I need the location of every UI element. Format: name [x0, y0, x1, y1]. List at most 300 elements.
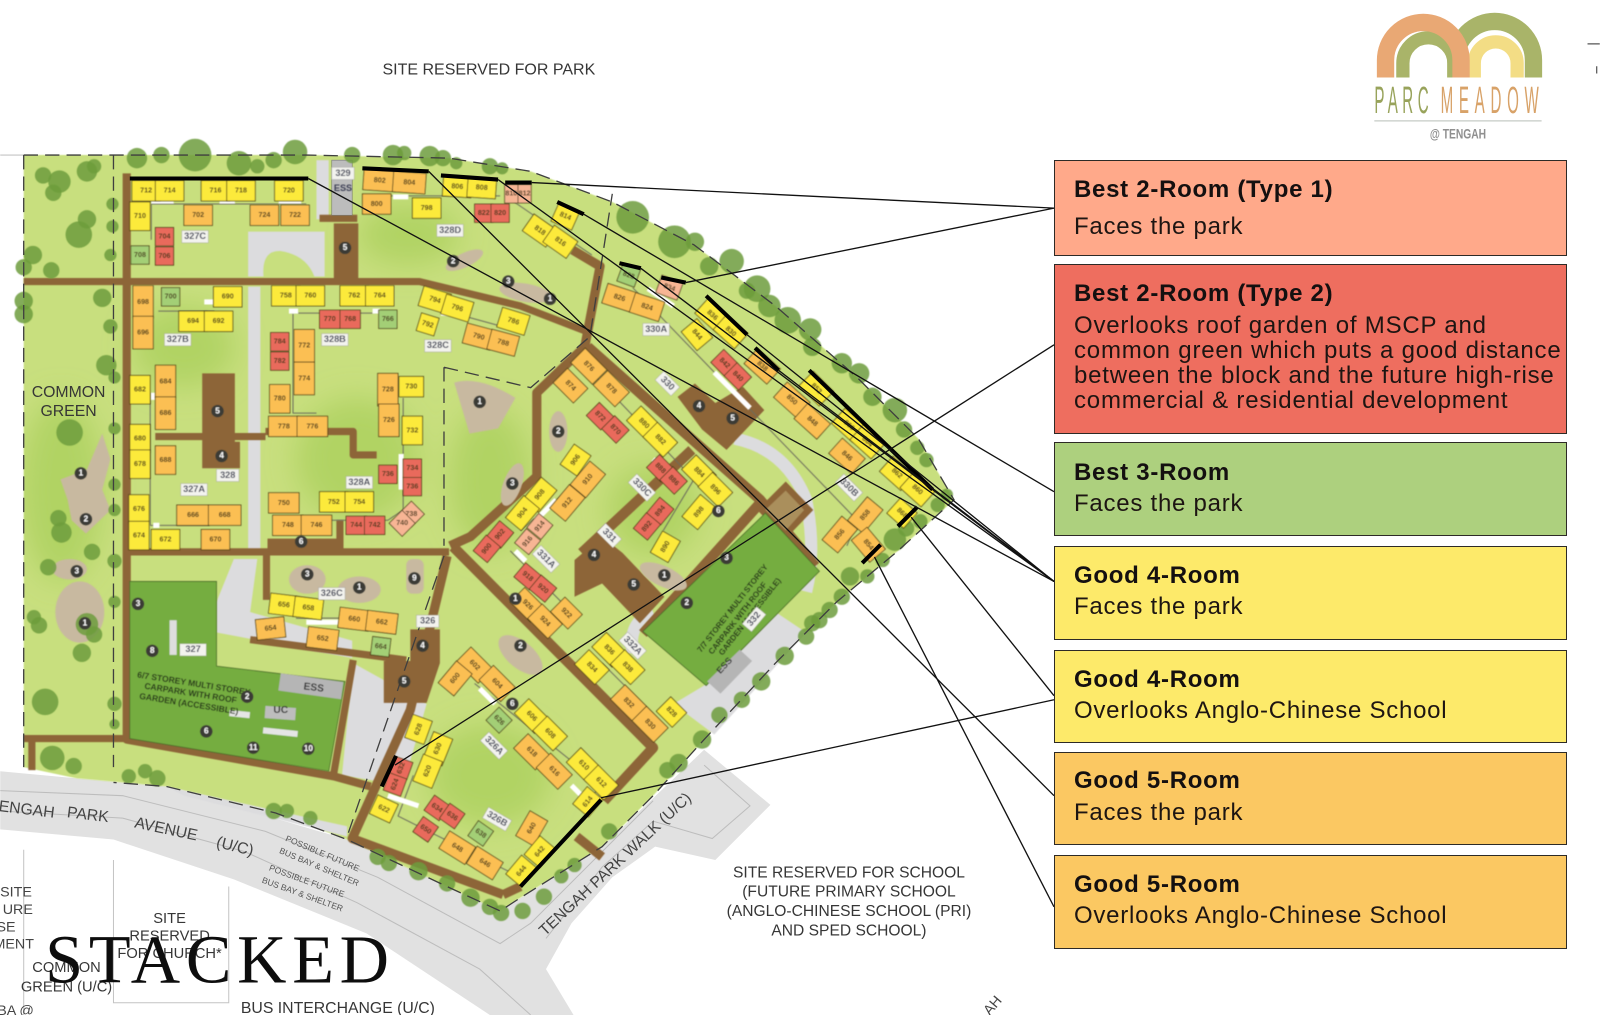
apartment units, block 326A: 600: [448, 671, 462, 685]
apartment units, block 326B: 648: [450, 841, 464, 854]
apartment units, block 328D: 804: [403, 178, 416, 187]
legend box: Best 3-Room: [1054, 442, 1567, 536]
apartment units, block 332A: 834: [585, 660, 599, 674]
apartment units, block 330C: 890: [659, 540, 672, 554]
apartment units, block 330A: 840: [731, 369, 745, 383]
apartment units, block 326C: 654: [264, 624, 277, 633]
apartment units, block 330A: 826: [613, 292, 626, 303]
apartment units, block 330B: 868: [895, 506, 909, 520]
numbered legend markers: 5: [631, 580, 636, 589]
apartment units, block 328C: 792: [421, 319, 435, 330]
apartment units, block 327A: 668: [219, 511, 231, 519]
apartment units, block 332A: 828: [665, 705, 679, 719]
Parc Meadow logo: PARC: [1374, 80, 1433, 122]
apartment units, block 326A: [438, 647, 618, 817]
block number tags: 332: [745, 610, 762, 628]
apartment units, block 327C: 702: [192, 211, 204, 219]
apartment units, block 330B: 850: [785, 393, 799, 407]
apartment units, block 326A: 610: [577, 758, 591, 772]
apartment units, block 330B: 860: [910, 483, 925, 497]
apartment units, block 331A: [473, 444, 605, 639]
apartment units, block 330C: 874: [564, 378, 578, 393]
multi-storey carpark 332: [643, 513, 819, 694]
apartment units, block 328B: 776: [306, 422, 318, 430]
apartment units, block 331A: 922: [559, 606, 574, 620]
numbered legend markers: 3: [136, 599, 141, 608]
apartment units, block 330B: 852: [809, 382, 823, 396]
legend box: Good 4-Room faces park: [1054, 546, 1567, 640]
apartment units, block 328B: [269, 286, 397, 437]
apartment units, block 328D: 810: [505, 190, 517, 198]
apartment units, block 331A: 908: [533, 488, 547, 502]
apartment units, block 326A: 608: [543, 726, 557, 740]
description: Faces the park: [1074, 213, 1243, 240]
apartment units, block 326C: 664: [374, 642, 387, 651]
apartment units, block 328B: 780: [274, 395, 286, 403]
numbered legend markers: 1: [662, 570, 667, 579]
block number tags: 328C: [427, 340, 449, 350]
apartment units, block 330B: 866: [842, 418, 856, 432]
apartment units, block 326A: 606: [525, 709, 539, 723]
road network: [0, 155, 770, 1015]
apartment units, block 330A: 824: [640, 301, 654, 313]
apartment units, block 327B: 700: [165, 293, 177, 301]
leader lines from units to legend boxes: [308, 171, 1054, 907]
site ground: [21, 155, 954, 911]
apartment units, block 330C: 872: [593, 409, 607, 423]
legend box: Good 5-Room faces park: [1054, 752, 1567, 845]
apartment units, block 328B: 762: [348, 292, 360, 300]
apartment units, block 328D: 818: [533, 224, 547, 237]
apartment units, block 326B: 638: [474, 827, 488, 840]
block number tags: 326: [420, 616, 435, 626]
numbered legend markers: 3: [506, 277, 511, 286]
apartment units, block 326A: 616: [547, 764, 561, 778]
apartment units, block 330B: 854: [862, 538, 875, 552]
apartment units, block 327A: 666: [187, 511, 199, 519]
apartment units, block 330C: 888: [653, 461, 667, 475]
label: site reserved for school: AND SPED SCHOOL): [771, 922, 927, 939]
legend box: Best 2-Room Type 2: [1054, 264, 1567, 434]
heading: Best 3-Room: [1074, 459, 1230, 486]
numbered legend markers: 1: [357, 583, 362, 592]
numbered legend markers: 6: [299, 537, 304, 546]
apartment units, block 326A: 618: [525, 745, 539, 759]
apartment units, block 328B: 760: [304, 292, 316, 300]
apartment units, block 328B: 778: [278, 422, 290, 430]
heading: Best 2-Room (Type 1): [1074, 176, 1333, 203]
block number tags: 328A: [348, 477, 371, 487]
apartment units, block 326B: 624: [389, 777, 401, 791]
apartment units, block 330B: 848: [805, 414, 819, 428]
apartment units, block 331A: 910: [581, 472, 595, 487]
multi-storey carpark 327: GARDEN (ACCESSIBLE): [139, 691, 239, 716]
apartment units, block 331A: 902: [493, 527, 507, 542]
label: possible future bus bays: POSSIBLE FUTURE: [284, 833, 361, 874]
apartment units, block 328A: 748: [282, 521, 294, 529]
label: site reserved for school: SITE RESERVED FOR SCHOOL: [733, 864, 965, 881]
numbered legend markers: 1: [79, 468, 84, 477]
apartment units, block 328D: 822: [478, 209, 490, 217]
description: Overlooks Anglo-Chinese School: [1074, 902, 1447, 929]
multi-storey carpark 332: GARDEN (ACCESSIBLE): [717, 576, 783, 657]
apartment units, block 327B: [133, 286, 242, 349]
apartment units, block 328B: 784: [274, 338, 286, 346]
apartment units, block 330A: 838: [755, 359, 769, 373]
brown footpaths: [24, 173, 815, 895]
apartment units, block 327A: 672: [160, 536, 171, 544]
label: common green under construction: COMMON: [32, 960, 101, 976]
apartment units, block 328D: 816: [553, 235, 568, 248]
numbered legend markers: [71, 242, 739, 755]
apartment units, block 330B: 846: [840, 449, 854, 463]
block number tags: 331A: [535, 547, 558, 570]
thick black facade markers: [130, 168, 933, 886]
label: possible future bus bays: BUS BAY & SHELTER: [278, 845, 361, 888]
apartment units, block 328C: 796: [450, 302, 464, 314]
apartment units, block 330C: 876: [582, 359, 596, 373]
apartment units, block 332A: 836: [602, 643, 616, 657]
apartment units, block 328A: 750: [278, 499, 290, 507]
label: site reserved for church: RESERVED: [129, 929, 210, 945]
trees along the boundary: [15, 139, 953, 921]
apartment units, block 327C: 724: [259, 211, 270, 219]
label: Tengah Park Avenue: AVENUE: [133, 815, 199, 844]
apartment units, block 328A: 736: [382, 470, 394, 478]
apartment units, block 330A: [602, 264, 780, 390]
apartment units, block 331A: 906: [569, 453, 582, 467]
apartment units, block 327B: 694: [187, 317, 199, 325]
apartment units, block 328A: 730: [405, 383, 417, 391]
apartment units, block 332A: [575, 632, 687, 742]
apartment units, block 328B: 758: [280, 292, 292, 300]
apartment units, block 326C: 652: [316, 634, 329, 643]
multi-storey carpark 327: UC: [273, 705, 289, 716]
apartment units, block 326B: 650: [419, 823, 433, 836]
label: site reserved for church: FOR CHURCH*: [117, 946, 222, 962]
apartment units, block 328B: 782: [274, 357, 286, 365]
numbered legend markers: 2: [451, 256, 456, 265]
apartment units, block 328D: 808: [476, 183, 488, 192]
apartment units, block 328A: 744: [350, 521, 362, 529]
apartment units, block 326B: 646: [478, 856, 492, 869]
apartment units, block 330C: 892: [640, 519, 654, 533]
multi-storey carpark 327: 6/7 STOREY MULTI STOREY: [137, 669, 251, 697]
label: common green under construction: GREEN (U/C): [21, 980, 112, 996]
multi-storey carpark 327: CARPARK WITH ROOF: [144, 681, 238, 705]
apartment units, block 328A: 734: [406, 464, 418, 472]
apartment units, block 330C: 870: [608, 422, 622, 436]
label: cropped site text at left: URE: [3, 902, 33, 918]
apartment units, block 326B: 642: [533, 845, 547, 859]
apartment units, block 328B: 764: [374, 292, 386, 300]
label: site reserved for school: (FUTURE PRIMARY SCHOOL: [742, 884, 956, 901]
apartment units, block 326B: 640: [525, 821, 538, 835]
apartment units, block 327C: 718: [235, 187, 247, 195]
apartment units, block 330A: 828: [622, 270, 636, 281]
apartment units, block 331A: 904: [516, 506, 529, 520]
block number tags: 329: [335, 168, 351, 178]
block number tags: 330A: [645, 324, 667, 334]
apartment units, block 327A: [129, 365, 241, 550]
apartment units, block 328D: 814: [558, 210, 573, 222]
block number tags: ESS: [334, 183, 352, 193]
block number tags: 326B: [485, 809, 510, 829]
apartment units, block 327A: 684: [160, 377, 171, 385]
apartment units, block 326C: 662: [375, 617, 388, 627]
numbered legend markers: 5: [730, 413, 735, 422]
numbered legend markers: 3: [305, 569, 310, 578]
apartment units, block 330B: [774, 371, 935, 562]
apartment units, block 331A: 924: [538, 614, 552, 628]
apartment units, block 327A: 688: [160, 456, 171, 464]
apartment units, block 332A: 832: [622, 696, 636, 710]
apartment units, block 326C: 656: [277, 600, 290, 610]
block number tags: 327C: [184, 231, 206, 241]
description: commercial & residential development: [1074, 387, 1508, 414]
apartment units, block 327B: 696: [137, 328, 149, 336]
description: Faces the park: [1074, 593, 1243, 620]
apartment units, block 328D: 812: [519, 190, 531, 198]
apartment units, block 326B: 636: [445, 809, 459, 823]
numbered legend markers: 8: [150, 646, 155, 655]
apartment units, block 327C: 712: [140, 187, 152, 195]
apartment units, block 328D: 798: [421, 204, 433, 212]
multi-storey carpark 332: 7/7 STOREY MULTI STOREY: [696, 562, 770, 654]
description: Overlooks Anglo-Chinese School: [1074, 697, 1447, 724]
apartment units, block 330C: 878: [604, 382, 618, 396]
apartment units, block 328A: 728: [382, 386, 394, 394]
description: Overlooks roof garden of MSCP and: [1074, 312, 1487, 339]
apartment units, block 328D: 802: [374, 176, 386, 185]
apartment units, block 330B: 858: [858, 508, 872, 522]
legend box: Best 2-Room Type 1: [1054, 160, 1567, 256]
heading: Good 4-Room: [1074, 562, 1241, 589]
label: possible future bus bays: BUS BAY & SHELTER: [261, 875, 344, 914]
description: between the block and the future high-rise: [1074, 362, 1555, 389]
apartment units, block 332A: 830: [643, 717, 657, 731]
label: possible future bus bays: [261, 833, 361, 914]
apartment units, block 328A: 738: [405, 510, 417, 518]
apartment units, block 330A: 836: [705, 308, 719, 322]
apartment units, block 331A: 912: [560, 496, 574, 510]
apartment units, block 330A: 844: [690, 327, 704, 342]
numbered legend markers: 3: [74, 566, 79, 575]
ESS block 329 strip: [332, 160, 352, 215]
label: common green: COMMON: [32, 384, 105, 401]
label: site reserved for church: SITE: [153, 911, 186, 927]
apartment units, block 330C: 886: [667, 473, 681, 487]
label: common green: GREEN: [40, 403, 97, 420]
apartment units, block 327C: 706: [159, 252, 170, 260]
apartment units, block 327A: 676: [133, 505, 145, 513]
label: Tengah Park Avenue: [0, 798, 255, 860]
block number tags: [164, 167, 863, 831]
block number tags: 328D: [439, 225, 461, 235]
legend box: Good 5-Room overlooks school: [1054, 855, 1567, 949]
apartment units, block 328A: 732: [406, 426, 418, 434]
heading: Good 4-Room: [1074, 666, 1241, 693]
apartment units, block 331A: 914: [533, 519, 547, 533]
apartment units, block 327C: 722: [289, 211, 301, 219]
numbered legend markers: 6: [204, 727, 209, 736]
apartment units, block 326B: 630: [432, 742, 444, 756]
apartment units, block 327A: 678: [134, 460, 146, 468]
description: [1074, 312, 1561, 414]
apartment units, block 330B: 856: [833, 527, 847, 542]
apartment units, block 328A: [269, 373, 424, 536]
Parc Meadow logo: MEADOW: [1441, 80, 1544, 122]
block number tags: 328: [220, 470, 235, 480]
apartment units, block 331A: 900: [480, 542, 494, 556]
apartment units, block 327A: 670: [210, 536, 221, 544]
block number tags: 327A: [183, 484, 205, 494]
numbered legend markers: 6: [716, 506, 721, 515]
apartment units, block 326B: 622: [377, 803, 391, 815]
label: possible future bus bays: POSSIBLE FUTURE: [268, 863, 346, 899]
numbered legend markers: 2: [245, 692, 250, 701]
apartment units, block 330A: 830: [724, 325, 738, 338]
block number tags: 330C: [631, 476, 654, 499]
numbered legend markers: 1: [548, 294, 553, 303]
apartment units, block 330C: 882: [653, 433, 667, 447]
numbered legend markers: 3: [510, 479, 515, 488]
numbered legend markers: 3: [724, 553, 729, 562]
apartment units, block 328D: [362, 169, 580, 258]
label: Tengah Park Walk: TENGAH PARK WALK (U/C): [536, 790, 695, 939]
Parc Meadow logo: [1374, 21, 1544, 142]
apartment units, block 327C: 714: [164, 187, 176, 195]
apartment units, block 326A: 626: [492, 713, 506, 727]
description: Faces the park: [1074, 490, 1243, 517]
apartment units, block 328C: 786: [507, 316, 520, 327]
apartment units, block 326A: 614: [581, 795, 595, 809]
dashed site boundary: [24, 155, 954, 911]
apartment units, block 330C: 884: [692, 465, 706, 479]
apartment units, block 330C: 898: [692, 505, 706, 519]
apartment units, block 327B: 698: [137, 298, 149, 306]
apartment units, block 327A: 680: [134, 435, 146, 443]
apartment units, block 327A: 682: [134, 386, 146, 394]
open plazas: [52, 245, 691, 682]
numbered legend markers: 5: [215, 406, 220, 415]
block number tags: 327: [185, 644, 201, 654]
apartment units, block 328A: 742: [369, 521, 381, 529]
apartment units, block 330A: 834: [663, 282, 676, 293]
apartment units, block 327A: 674: [133, 531, 145, 539]
apartment units, block 328C: 788: [496, 337, 510, 348]
apartment units, block 326C: [255, 593, 398, 657]
apartment units, block 327B: 690: [222, 293, 234, 301]
apartment units, block 328B: 766: [382, 315, 394, 323]
numbered legend markers: 11: [249, 743, 258, 752]
heading: Best 2-Room (Type 2): [1074, 280, 1333, 307]
grey driveways: [167, 160, 811, 836]
numbered legend markers: 5: [343, 243, 348, 252]
apartment units, block 328A: 726: [383, 416, 395, 424]
description: common green which puts a good distance: [1074, 337, 1561, 364]
block number tags: 326A: [483, 734, 506, 757]
apartment units, block 326B: 620: [422, 764, 434, 778]
apartment units, block 331A: 920: [536, 582, 550, 595]
label: cropped site text at left: SITE: [0, 885, 32, 901]
label: site reserved for park: SITE RESERVED FOR PARK: [382, 61, 596, 78]
apartment units, block 328D: 800: [371, 200, 383, 208]
numbered legend markers: 4: [219, 451, 224, 460]
apartment units, block 328D: 820: [494, 209, 506, 217]
apartment units, block 327C: 708: [134, 251, 146, 259]
access corridors between blocks: [150, 196, 857, 877]
numbered legend markers: 9: [412, 574, 417, 583]
description: Faces the park: [1074, 799, 1243, 826]
apartment units, block 328A: 752: [328, 498, 340, 506]
block number tags: 326C: [321, 588, 343, 598]
apartment units, block 327C: 704: [159, 233, 170, 241]
apartment units, block 327C: [130, 181, 309, 265]
apartment units, block 328A: 754: [353, 498, 365, 506]
apartment units, block 327C: 716: [210, 187, 221, 195]
apartment units, block 330C: 880: [637, 416, 651, 430]
block number tags: 331: [601, 526, 619, 544]
apartment units, block 330C: [553, 348, 733, 562]
apartment units, block 331A: 916: [521, 534, 534, 549]
apartment units, block 331A: 926: [521, 598, 535, 612]
apartment units, block 328C: 794: [428, 294, 442, 305]
apartment units, block 326B: 644: [515, 864, 528, 878]
apartment units, block 330A: 842: [718, 356, 732, 370]
numbered legend markers: 4: [592, 550, 597, 559]
numbered legend markers: 2: [556, 427, 561, 436]
multi-storey carpark 332: CARPARK WITH ROOF: [707, 580, 769, 656]
apartment units, block 326B: [369, 714, 556, 887]
apartment units, block 326B: 634: [430, 801, 444, 815]
apartment units, block 328B: 772: [298, 342, 310, 350]
apartment units, block 332A: 838: [621, 660, 635, 674]
heading: Good 5-Room: [1074, 871, 1241, 898]
apartment units, block 328B: 768: [344, 315, 356, 323]
block number tags: 332A: [622, 634, 645, 657]
legend box: Good 4-Room overlooks school: [1054, 650, 1567, 743]
apartment units, block 330C: 896: [708, 483, 722, 497]
apartment units, block 326C: 658: [302, 603, 315, 613]
apartment units, block 326A: 604: [490, 676, 504, 690]
apartment units, block 327C: 710: [134, 212, 146, 220]
heading: Good 5-Room: [1074, 767, 1241, 794]
numbered legend markers: 1: [83, 618, 88, 627]
apartment units, block 326A: 602: [468, 658, 482, 672]
apartment units, block 328D: 806: [451, 182, 463, 191]
apartment units, block 326A: 612: [594, 775, 608, 789]
apartment units, block 326B: 632: [395, 761, 407, 775]
numbered legend markers: 2: [684, 598, 689, 607]
apartment units, block 328C: [416, 286, 530, 356]
apartment units, block 328A: 740: [396, 519, 408, 527]
apartment units, block 326B: 628: [413, 722, 424, 736]
cropped mark at right edge: [1588, 44, 1600, 73]
apartment units, block 328B: 774: [298, 374, 310, 382]
numbered legend markers: 2: [84, 514, 89, 523]
apartment units, block 328C: 790: [472, 331, 486, 342]
apartment units, block 330B: 862: [890, 466, 904, 480]
multi-storey carpark 332: ESS: [714, 655, 734, 676]
numbered legend markers: 4: [420, 641, 425, 650]
block number tags: 327B: [167, 334, 189, 344]
numbered legend markers: 5: [402, 677, 407, 686]
block number tags: 328B: [324, 334, 346, 344]
numbered legend markers: 1: [513, 594, 518, 603]
apartment units, block 326C: 660: [348, 614, 361, 624]
numbered legend markers: 1: [477, 397, 482, 406]
